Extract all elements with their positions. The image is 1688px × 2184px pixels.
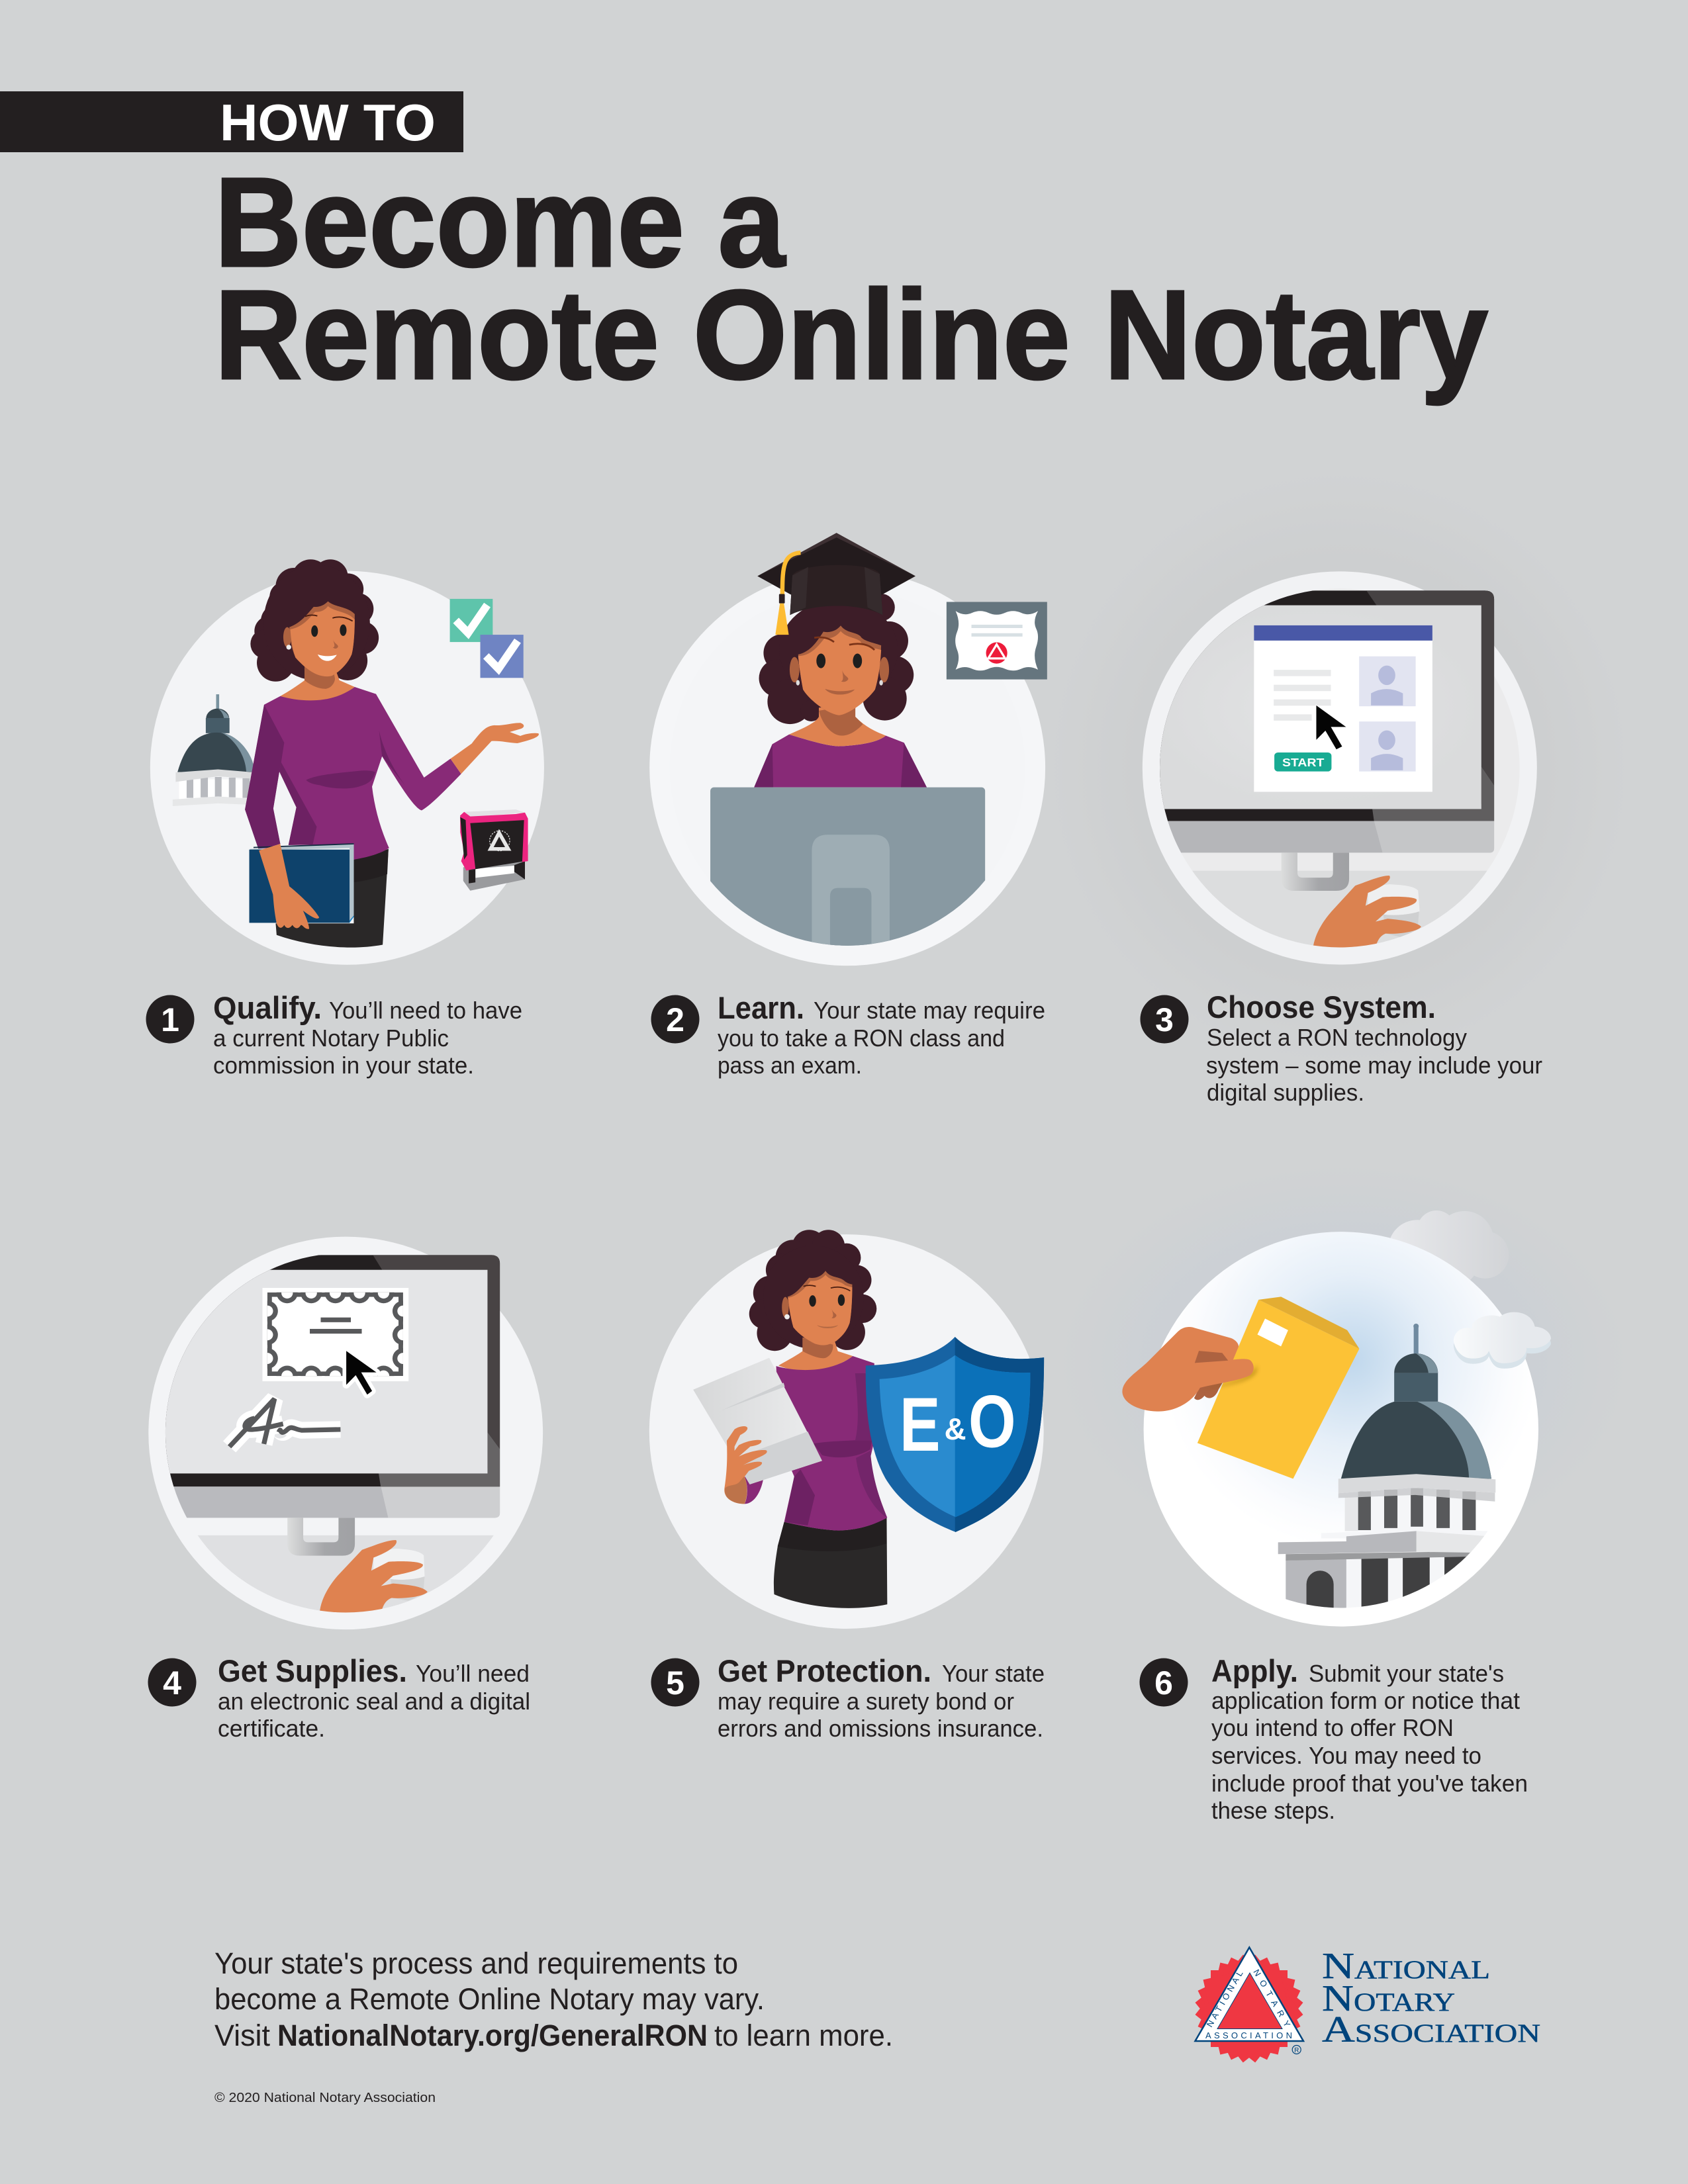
shirt bbox=[245, 687, 461, 860]
icon: E and O shield: O bbox=[968, 1379, 1016, 1463]
neck bbox=[789, 705, 886, 747]
text: get supplies bbox=[218, 1653, 530, 1742]
circle background bbox=[1144, 1232, 1538, 1627]
how to banner: HOW TO bbox=[220, 93, 436, 152]
panel: step 6 illustration bbox=[1122, 1210, 1551, 1627]
panel: step 1 illustration bbox=[150, 559, 544, 965]
panel: step 1 caption bbox=[146, 990, 522, 1079]
icon: capitol building bbox=[173, 694, 254, 806]
skirt bbox=[275, 849, 389, 948]
number badge 5 bbox=[651, 1659, 699, 1706]
logo seal: NOTARY bbox=[1251, 1968, 1293, 2029]
text: choose system bbox=[1206, 989, 1542, 1106]
text: get supplies: an electronic seal and a digital bbox=[218, 1688, 530, 1715]
icon: notary stamp bbox=[460, 809, 528, 891]
text: apply bbox=[1211, 1653, 1528, 1824]
raised hand bbox=[451, 723, 539, 774]
woman figure bbox=[744, 1230, 887, 1608]
sleeve bbox=[744, 1477, 763, 1504]
number badge 6 bbox=[1140, 1659, 1188, 1706]
text: qualify: Qualify. bbox=[213, 990, 322, 1025]
icon: document bbox=[693, 1358, 822, 1484]
panel: step 5 caption bbox=[651, 1653, 1045, 1742]
footer note: become a Remote Online Notary may vary. bbox=[214, 1982, 765, 2016]
text: apply: Apply. bbox=[1211, 1653, 1298, 1688]
text: choose system: system – some may include your bbox=[1206, 1052, 1542, 1079]
arm and hand holding folder bbox=[259, 844, 319, 929]
number badge 6: 6 bbox=[1154, 1664, 1173, 1702]
text: qualify: You’ll need to have bbox=[329, 997, 522, 1024]
panel: step 2 illustration bbox=[649, 533, 1047, 972]
logo wordmark: Notary bbox=[1322, 1978, 1455, 2019]
footer note: NationalNotary.org/GeneralRON bbox=[277, 2019, 708, 2052]
footer note: to learn more. bbox=[714, 2019, 893, 2052]
footer note: Your state's process and requirements to bbox=[214, 1946, 738, 1980]
soft glow behind step 3 bbox=[1049, 470, 1631, 1066]
copyright: © 2020 National Notary Association bbox=[214, 2091, 436, 2105]
logo seal: R bbox=[1294, 2047, 1299, 2054]
panel: step 6 caption bbox=[1140, 1653, 1528, 1824]
icon: graduation cap bbox=[757, 533, 915, 635]
neck bbox=[280, 665, 355, 702]
icon: hand on mouse bbox=[320, 1540, 428, 1615]
logo seal: ASSOCIATION bbox=[1205, 2030, 1292, 2040]
icon: back cloud bbox=[1388, 1210, 1509, 1287]
text: get protection: may require a surety bond or bbox=[718, 1688, 1014, 1715]
number badge 4 bbox=[148, 1659, 196, 1706]
panel: step 3 illustration bbox=[1143, 571, 1544, 964]
desk surface bbox=[198, 1535, 494, 1611]
face bbox=[782, 1297, 789, 1318]
icon: computer monitor bbox=[1149, 590, 1494, 891]
text: apply: you intend to offer RON bbox=[1211, 1714, 1454, 1741]
text: apply: services. You may need to bbox=[1211, 1742, 1481, 1769]
circle background bbox=[649, 570, 1045, 966]
text lines bbox=[1274, 670, 1331, 721]
footer note: Visit bbox=[214, 2019, 270, 2052]
text: apply: these steps. bbox=[1211, 1797, 1335, 1824]
hair bbox=[250, 559, 379, 682]
user photo bottom bbox=[1359, 721, 1416, 772]
icon: hand holding envelope bbox=[1122, 1327, 1257, 1412]
main heading bbox=[214, 151, 1488, 406]
start button bbox=[1274, 752, 1331, 772]
text: choose system: Choose System. bbox=[1207, 989, 1436, 1024]
hair bbox=[759, 594, 914, 724]
number badge 1 bbox=[146, 995, 195, 1043]
logo wordmark bbox=[1322, 1946, 1540, 2050]
text: learn: pass an exam. bbox=[718, 1052, 862, 1079]
panel: step 4 illustration bbox=[148, 1237, 543, 1629]
hand holding document bbox=[724, 1426, 767, 1504]
circle background bbox=[1143, 571, 1537, 964]
panel: step 5 illustration bbox=[649, 1230, 1044, 1629]
logo seal: NATIONAL bbox=[1205, 1969, 1245, 2029]
text: choose system: Select a RON technology bbox=[1207, 1024, 1467, 1051]
text: get protection: Your state bbox=[942, 1660, 1045, 1687]
text: get protection: errors and omissions insurance. bbox=[718, 1715, 1043, 1742]
soft glow behind step 6 bbox=[1059, 1165, 1628, 1562]
icon: front cloud bbox=[1454, 1312, 1551, 1369]
main heading: Become a bbox=[214, 151, 786, 293]
face bbox=[283, 627, 291, 647]
icon: certificate bbox=[947, 602, 1047, 680]
text: get supplies: certificate. bbox=[218, 1715, 325, 1742]
text: choose system: digital supplies. bbox=[1207, 1079, 1364, 1106]
logo wordmark: National bbox=[1322, 1946, 1490, 1987]
text: get protection: Get Protection. bbox=[718, 1653, 931, 1688]
text: qualify: commission in your state. bbox=[213, 1052, 474, 1079]
desk surface bbox=[1193, 871, 1487, 945]
panel: step 3 caption bbox=[1140, 989, 1542, 1106]
number badge 2 bbox=[651, 995, 699, 1043]
text: qualify: a current Notary Public bbox=[213, 1024, 449, 1052]
title block bbox=[0, 91, 1488, 406]
hair bbox=[749, 1230, 876, 1351]
text: apply: Submit your state's bbox=[1309, 1660, 1504, 1687]
footer note bbox=[214, 1946, 893, 2052]
shirt bbox=[754, 735, 927, 788]
folder bbox=[250, 843, 353, 923]
start button: START bbox=[1282, 756, 1325, 769]
icon: E and O shield: & bbox=[945, 1412, 966, 1446]
number badge 4: 4 bbox=[163, 1664, 181, 1702]
face bbox=[790, 657, 800, 682]
icon: check boxes bbox=[450, 599, 524, 678]
text: apply: include proof that you've taken bbox=[1211, 1770, 1528, 1797]
icon: digital certificate bbox=[262, 1288, 409, 1381]
text: learn bbox=[718, 990, 1045, 1079]
woman at computer bbox=[754, 594, 927, 788]
main heading: Remote Online Notary bbox=[214, 263, 1488, 406]
skirt bbox=[774, 1518, 887, 1608]
text: learn: Your state may require bbox=[814, 997, 1045, 1024]
icon: computer monitor back bbox=[710, 788, 985, 946]
logo wordmark: Association bbox=[1322, 2009, 1540, 2050]
neck bbox=[778, 1338, 853, 1371]
logo seal bbox=[1195, 1947, 1303, 2063]
panel: step 4 caption bbox=[148, 1653, 530, 1742]
icon: signature bbox=[230, 1399, 340, 1447]
logo: national notary association bbox=[1195, 1946, 1540, 2063]
text: apply: application form or notice that bbox=[1211, 1687, 1520, 1714]
circle background bbox=[649, 1234, 1044, 1629]
user photo top bbox=[1359, 657, 1416, 706]
panel: step 2 caption bbox=[651, 990, 1045, 1079]
number badge 1: 1 bbox=[161, 1001, 179, 1038]
text: learn: Learn. bbox=[718, 990, 804, 1025]
how to banner bbox=[0, 91, 463, 152]
circle background bbox=[148, 1237, 543, 1629]
icon: computer monitor bbox=[161, 1255, 500, 1556]
software window bbox=[1254, 625, 1432, 792]
woman figure bbox=[245, 559, 539, 948]
icon: cursor bbox=[346, 1351, 377, 1394]
number badge 3: 3 bbox=[1155, 1001, 1174, 1038]
number badge 2: 2 bbox=[666, 1001, 684, 1038]
text: learn: you to take a RON class and bbox=[718, 1024, 1005, 1052]
icon: cursor bbox=[1316, 705, 1346, 749]
text: get supplies: You’ll need bbox=[416, 1660, 530, 1687]
circle background bbox=[150, 571, 544, 965]
icon: E and O shield bbox=[866, 1337, 1044, 1532]
shirt bbox=[776, 1356, 887, 1531]
icon: capitol building bbox=[1278, 1324, 1495, 1611]
text: get protection bbox=[718, 1653, 1045, 1742]
number badge 5: 5 bbox=[666, 1664, 684, 1702]
icon: envelope bbox=[1197, 1297, 1359, 1479]
icon: hand on mouse bbox=[1313, 876, 1421, 950]
text: get supplies: Get Supplies. bbox=[218, 1653, 407, 1688]
icon: E and O shield: E bbox=[900, 1383, 941, 1467]
number badge 3 bbox=[1140, 995, 1189, 1043]
text: qualify bbox=[213, 990, 522, 1079]
